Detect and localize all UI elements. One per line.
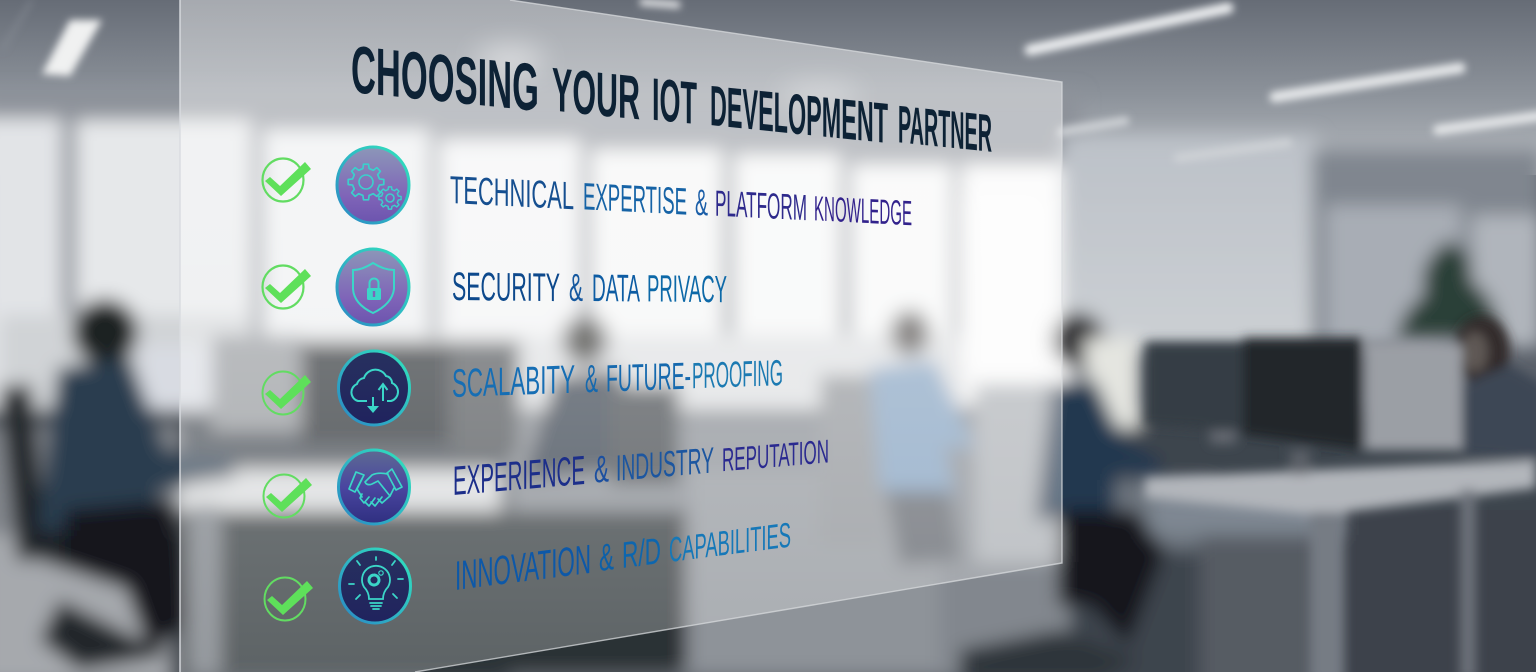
- label 3: FUTURE-: [606, 356, 691, 400]
- ceiling: [0, 0, 1536, 175]
- title: IOT: [652, 66, 697, 137]
- text: PARTNER: [898, 95, 992, 164]
- back monitors behind glass: [212, 335, 302, 430]
- chairs: [820, 375, 882, 545]
- label 4: &: [594, 448, 609, 492]
- label 1: &: [695, 181, 708, 223]
- right cabinet: [1200, 528, 1335, 672]
- label 1: TECHNICAL: [450, 169, 574, 218]
- item 4: experience: [264, 433, 829, 524]
- label 4: [453, 433, 829, 504]
- person 3: [889, 309, 931, 357]
- icon: shield with lock: [337, 249, 409, 325]
- title: DEVELOPMENT: [710, 74, 888, 156]
- plant: [1395, 240, 1500, 340]
- label 5: &: [599, 535, 614, 580]
- item 1: technical expertise: [262, 147, 912, 233]
- right wall: [1062, 135, 1317, 350]
- text: PRIVACY: [647, 268, 727, 311]
- label 3: [452, 352, 783, 406]
- monitors: [1145, 342, 1246, 432]
- label 4: EXPERIENCE: [453, 447, 585, 504]
- check mark 4: [264, 474, 312, 518]
- check mark 2: [262, 266, 311, 308]
- title: [351, 32, 992, 164]
- label 4: INDUSTRY: [616, 440, 714, 489]
- reflections: [475, 46, 1050, 380]
- woman: [1454, 316, 1510, 384]
- glass edges: [179, 0, 181, 672]
- icon: cloud with arrows: [338, 351, 410, 425]
- label 3: SCALABITY: [452, 358, 575, 406]
- glass sheet: [180, 0, 1062, 672]
- label 5: R/D: [622, 529, 661, 576]
- back room: [1312, 150, 1536, 350]
- left desk: [180, 470, 500, 510]
- person 2: [561, 314, 609, 366]
- sharper foreground office elements: [1145, 316, 1536, 672]
- label 2: &: [569, 267, 583, 310]
- text: PROOFING: [692, 352, 783, 396]
- label 3: &: [585, 358, 598, 401]
- title: YOUR: [552, 56, 640, 133]
- label 4: REPUTATION: [722, 433, 829, 479]
- icon: gears: [337, 147, 409, 223]
- lower floor base: [0, 410, 1536, 672]
- check mark 3: [262, 372, 311, 414]
- label 1: PLATFORM: [715, 183, 807, 228]
- desk right: [1145, 460, 1536, 515]
- text: KNOWLEDGE: [814, 189, 912, 233]
- check mark 1: [262, 158, 311, 202]
- check mark 5: [264, 578, 313, 620]
- label 5: [455, 516, 791, 599]
- item 3: scalability: [262, 351, 783, 425]
- right person: [1049, 313, 1105, 367]
- label 5: CAPABILITIES: [669, 516, 791, 570]
- label 1: [450, 169, 912, 233]
- label 1: EXPERTISE: [583, 176, 687, 224]
- left person: [0, 384, 49, 561]
- label 5: INNOVATION: [455, 536, 591, 599]
- label 2: DATA: [592, 267, 640, 311]
- back wall and windows: [0, 92, 1080, 432]
- icon: light bulb: [340, 549, 410, 623]
- icon: handshake: [338, 450, 410, 524]
- item 5: innovation: [264, 516, 791, 623]
- label 2: SECURITY: [452, 265, 560, 310]
- title: CHOOSING: [351, 32, 539, 126]
- panel: frosted glass board: [180, 0, 1062, 672]
- ceiling lights: [2, 0, 1536, 158]
- item 2: security: [262, 249, 727, 325]
